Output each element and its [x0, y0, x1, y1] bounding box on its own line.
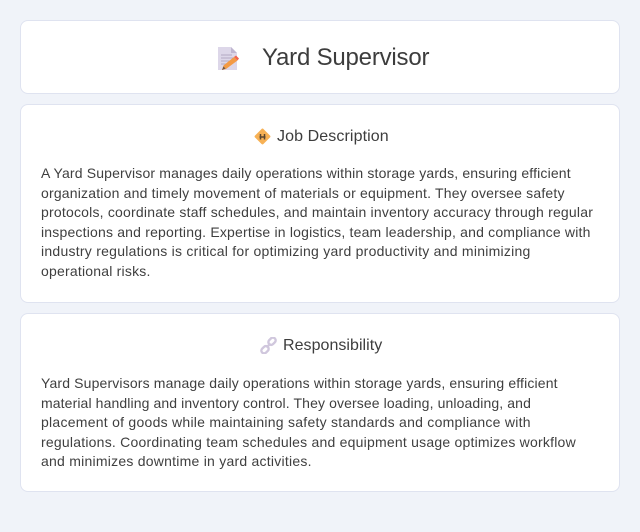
text block: job description: A Yard Supervisor manages daily operations within storage yards, ensuring efficient [41, 165, 571, 181]
panel: title card [20, 20, 620, 94]
text block: responsibility: placement of goods while maintaining safety standards and compliance with [41, 414, 531, 430]
text block: responsibility [41, 375, 576, 469]
text block: job description: operational risks. [41, 263, 151, 279]
panel: job description [20, 104, 620, 303]
text block: job description: inspections and reporting. Expertise in logistics, team leadership, and compliance with [41, 224, 591, 240]
heading: responsibility: Responsibility [283, 337, 382, 354]
text block: responsibility: Yard Supervisors manage daily operations within storage yards, ensuring efficient [41, 375, 558, 391]
text block: job description [41, 165, 593, 279]
title: Yard Supervisor [262, 44, 429, 71]
text block: responsibility: and minimizes downtime in yard activities. [41, 453, 312, 469]
text block: job description: industry regulations is critical for optimizing yard productivity and minimizing [41, 243, 531, 259]
icon: chain link [260, 337, 277, 354]
icon: road work diamond sign [254, 128, 270, 144]
icon: document with pencil [218, 47, 239, 70]
text block: responsibility: material handling and inventory control. They oversee loading, unloading, and [41, 395, 531, 411]
panel: responsibility [20, 313, 620, 492]
text block: responsibility: regulations. Coordinating team schedules and equipment usage optimizes workflow [41, 434, 576, 450]
text block: job description: organization and timely movement of materials or equipment. They oversee safety [41, 185, 565, 201]
heading: job description: Job Description [277, 128, 389, 145]
text block: job description: protocols, coordinate staff schedules, and maintain inventory accuracy through regular [41, 204, 593, 220]
